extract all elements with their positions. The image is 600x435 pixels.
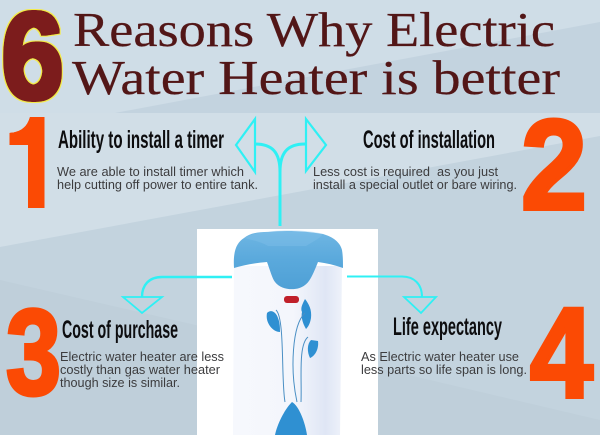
heater photo: [197, 229, 378, 435]
arrows top: [236, 119, 326, 226]
reason 1: Ability to install a timer: [58, 126, 224, 154]
title: Reasons Why Electric: [73, 2, 555, 57]
reason 4: Life expectancy: [393, 313, 502, 341]
reason 4: As Electric water heater use: [361, 349, 519, 364]
reason 2: install a special outlet or bare wiring.: [313, 177, 517, 192]
flower decoration: [267, 299, 318, 435]
arrow to reason 4: [347, 276, 436, 313]
reason 2: Less cost is required as you just: [313, 164, 498, 179]
heater lid: [234, 231, 343, 289]
lid highlight: [244, 230, 323, 246]
reason 3: Cost of purchase: [62, 316, 178, 344]
reason 4: less parts so life span is long.: [361, 362, 527, 377]
reason 1: help cutting off power to entire tank.: [57, 177, 258, 192]
arrow to reason 3: [123, 277, 232, 313]
reason 3: [60, 316, 224, 390]
title: Water Heater is better: [72, 50, 560, 105]
heater body: [233, 266, 342, 435]
reason 3: costly than gas water heater: [60, 362, 221, 377]
reason 2: [313, 126, 517, 192]
reason 4: [361, 313, 527, 377]
reason 3: Electric water heater are less: [60, 349, 224, 364]
reason 1: [57, 126, 258, 192]
number 4: 4: [530, 282, 593, 425]
title: [72, 2, 560, 105]
number 2: 2: [521, 94, 587, 237]
brand badge: [284, 296, 299, 303]
reason 2: Cost of installation: [363, 126, 495, 154]
reason 1: We are able to install timer which: [57, 164, 244, 179]
number 3: 3: [6, 284, 61, 420]
number 1: [10, 117, 44, 208]
reason 3: though size is similar.: [60, 375, 180, 390]
